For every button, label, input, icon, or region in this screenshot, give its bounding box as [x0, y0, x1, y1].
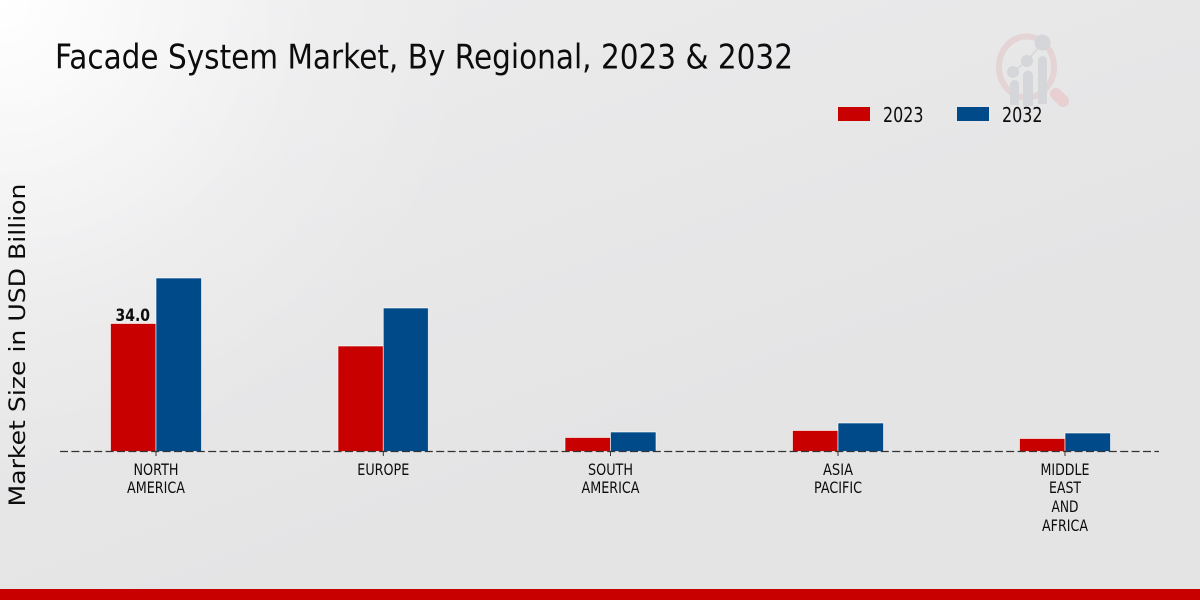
y axis label: Market Size in USD Billion	[5, 184, 31, 506]
label: Asia Pacific: ASIA	[823, 460, 853, 479]
bottom bar	[0, 589, 1200, 600]
legend item: 2023	[838, 103, 924, 127]
label: Middle East and Africa: AND	[1052, 497, 1078, 516]
bars: North America	[110, 278, 202, 452]
label: North America: NORTH	[134, 460, 178, 479]
legend item: 2023: 2023	[883, 103, 924, 127]
legend	[838, 103, 1042, 127]
bars: Asia Pacific	[792, 423, 884, 452]
label: South America: AMERICA	[582, 478, 640, 497]
data label: 34.0: 34.0	[116, 306, 150, 325]
legend item: 2032	[957, 103, 1042, 127]
label: Europe: EUROPE	[357, 460, 409, 479]
label: Middle East and Africa: AFRICA	[1042, 516, 1088, 535]
label: North America: AMERICA	[127, 478, 185, 497]
legend item: 2032: 2032	[1002, 103, 1042, 127]
label: South America: SOUTH	[588, 460, 633, 479]
label: Middle East and Africa: MIDDLE	[1040, 460, 1090, 479]
bars: Middle East and Africa	[1020, 433, 1110, 452]
bars: Europe	[338, 308, 428, 452]
title: Facade System Market, By Regional, 2023 & 2032	[55, 37, 793, 76]
label: Middle East and Africa: EAST	[1049, 478, 1081, 497]
label: Asia Pacific: PACIFIC	[814, 478, 862, 497]
bars: South America	[565, 432, 656, 452]
icon: watermark logo	[999, 34, 1063, 106]
x axis labels	[127, 460, 1090, 535]
bar chart	[60, 278, 1159, 456]
